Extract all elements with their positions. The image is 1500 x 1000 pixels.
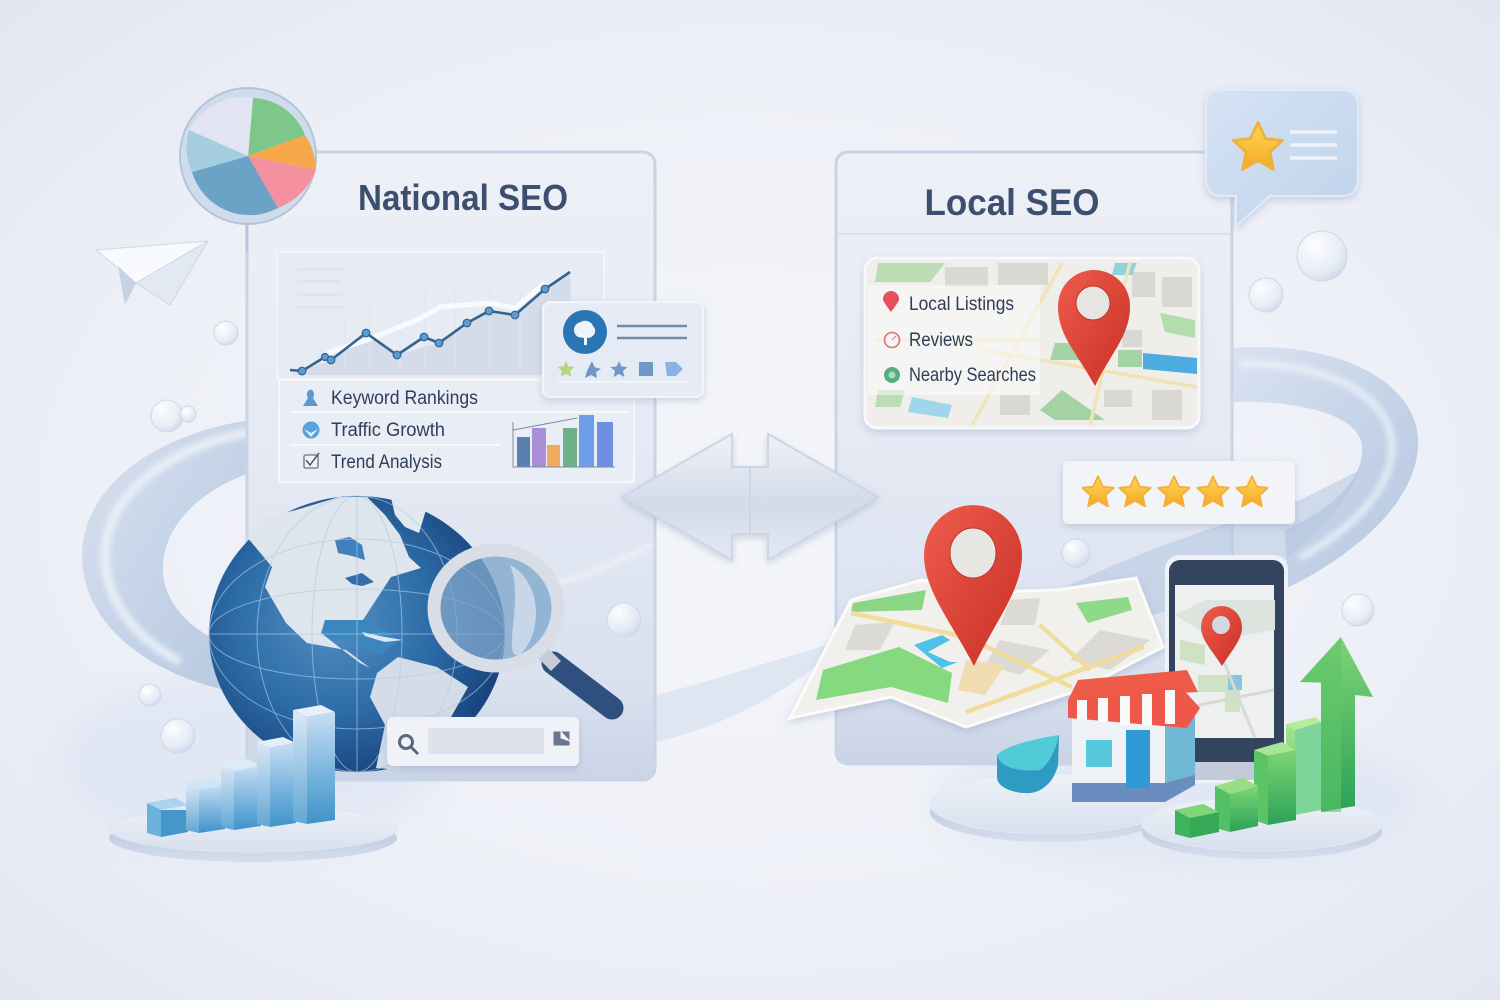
icon: paper plane bbox=[96, 241, 208, 305]
globe bbox=[209, 496, 505, 772]
magnifying glass bbox=[434, 550, 612, 708]
local listings row: Local Listings bbox=[909, 294, 1014, 315]
teal shape bbox=[997, 735, 1059, 793]
bar 1 bbox=[1175, 804, 1219, 838]
speech bubble with star bbox=[1206, 90, 1358, 226]
bar 2 bbox=[1215, 778, 1258, 832]
folded map bbox=[790, 578, 1163, 727]
mini bar chart bbox=[513, 415, 615, 467]
heading: National SEO: National SEO bbox=[358, 177, 568, 218]
map card bbox=[865, 258, 1199, 428]
search bar bbox=[387, 717, 579, 766]
icon: keyword rankings bbox=[303, 390, 318, 406]
panel: local SEO bbox=[836, 152, 1360, 764]
pie chart disc bbox=[180, 88, 316, 252]
traffic growth label: Traffic Growth bbox=[331, 420, 445, 441]
south america bbox=[370, 657, 468, 770]
caribbean sea highlight bbox=[322, 620, 400, 655]
podium with blue bars bbox=[109, 705, 397, 862]
growth bars and arrow bbox=[1175, 637, 1373, 838]
bar 4 bbox=[257, 737, 296, 827]
bar 3 bbox=[1254, 742, 1296, 825]
reviews row bbox=[884, 330, 973, 351]
double arrow between panels bbox=[622, 434, 878, 560]
growth podium bbox=[1142, 797, 1382, 859]
large map pin bbox=[924, 505, 1022, 666]
bar 1 bbox=[147, 798, 188, 837]
rating card bbox=[543, 302, 703, 397]
bar 4 bbox=[1286, 717, 1321, 815]
keyword rankings label: Keyword Rankings bbox=[331, 388, 478, 409]
phone bbox=[1165, 555, 1288, 783]
trend analysis label: Trend Analysis bbox=[331, 452, 442, 473]
hudson bay bbox=[335, 537, 365, 560]
five star rating card bbox=[1063, 461, 1295, 524]
icon: trend analysis bbox=[304, 453, 319, 468]
line chart bbox=[277, 252, 604, 379]
local listings row bbox=[883, 291, 1014, 315]
local podium bbox=[930, 774, 1170, 842]
north america bbox=[247, 497, 421, 668]
panel: national SEO bbox=[247, 152, 703, 780]
icon: map pin small card bbox=[1058, 270, 1130, 386]
bar 5 bbox=[293, 705, 335, 824]
reviews row: Reviews bbox=[909, 330, 973, 351]
great lakes bbox=[345, 573, 374, 586]
arrow bbox=[1300, 637, 1373, 812]
bar 2 bbox=[186, 778, 225, 833]
heading: Local SEO: Local SEO bbox=[924, 182, 1100, 223]
icon: traffic growth bbox=[302, 422, 320, 438]
soft background shading bbox=[60, 670, 1420, 870]
storefront bbox=[1068, 670, 1200, 802]
bar 3 bbox=[221, 759, 261, 830]
greenland bbox=[391, 498, 426, 533]
swoosh ring behind panels bbox=[82, 347, 1418, 742]
decorative bubbles bbox=[139, 231, 1374, 753]
cuba bbox=[362, 632, 403, 642]
metrics list bbox=[279, 380, 634, 482]
nearby searches row: Nearby Searches bbox=[909, 365, 1036, 386]
